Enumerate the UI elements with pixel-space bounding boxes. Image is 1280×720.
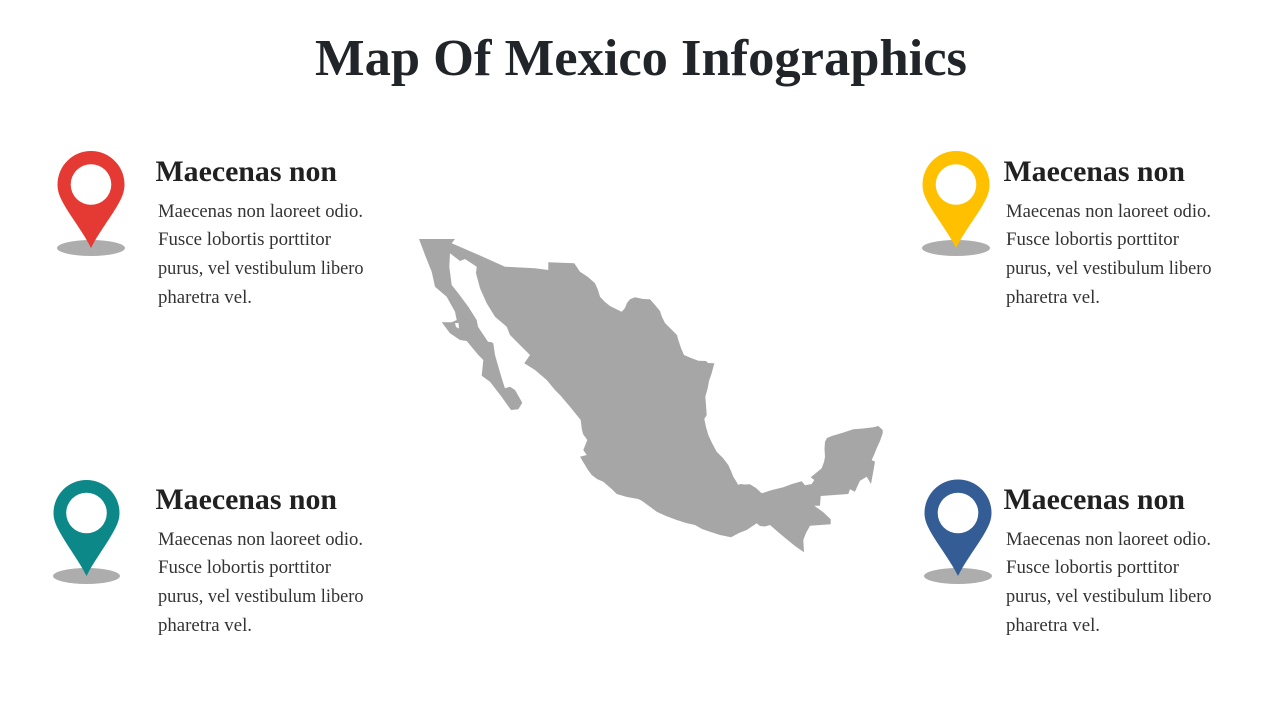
text block: Fusce lobortis porttitor — [158, 230, 331, 250]
text block — [1006, 530, 1212, 636]
text block: purus, vel vestibulum libero — [158, 587, 364, 607]
map of Mexico — [419, 239, 883, 552]
heading: Maecenas non — [1004, 483, 1185, 516]
text block: Maecenas non laoreet odio. — [158, 530, 363, 550]
text block — [158, 202, 364, 308]
text block: purus, vel vestibulum libero — [1006, 587, 1212, 607]
text block: Fusce lobortis porttitor — [1006, 230, 1179, 250]
text block: Maecenas non laoreet odio. — [158, 202, 363, 222]
heading: Maecenas non — [156, 155, 337, 188]
icon: blue map pin — [924, 480, 992, 584]
text block: Fusce lobortis porttitor — [1006, 558, 1179, 578]
text block: Fusce lobortis porttitor — [158, 558, 331, 578]
card: bottom left location — [53, 480, 364, 636]
text block: purus, vel vestibulum libero — [158, 259, 364, 279]
card: top left location — [57, 151, 364, 308]
text block: pharetra vel. — [1006, 616, 1100, 636]
text block — [1006, 202, 1212, 308]
text block: pharetra vel. — [158, 288, 252, 308]
icon: yellow map pin — [922, 151, 990, 256]
text block: pharetra vel. — [1006, 288, 1100, 308]
text block: purus, vel vestibulum libero — [1006, 259, 1212, 279]
heading: Maecenas non — [156, 483, 337, 516]
title: Map Of Mexico Infographics — [315, 30, 967, 87]
heading: Maecenas non — [1004, 155, 1185, 188]
card: bottom right location — [924, 480, 1212, 636]
icon: teal map pin — [53, 480, 120, 584]
text block: Maecenas non laoreet odio. — [1006, 530, 1211, 550]
text block: Maecenas non laoreet odio. — [1006, 202, 1211, 222]
text block: pharetra vel. — [158, 616, 252, 636]
text block — [158, 530, 364, 636]
card: top right location — [922, 151, 1212, 308]
icon: red map pin — [57, 151, 125, 256]
